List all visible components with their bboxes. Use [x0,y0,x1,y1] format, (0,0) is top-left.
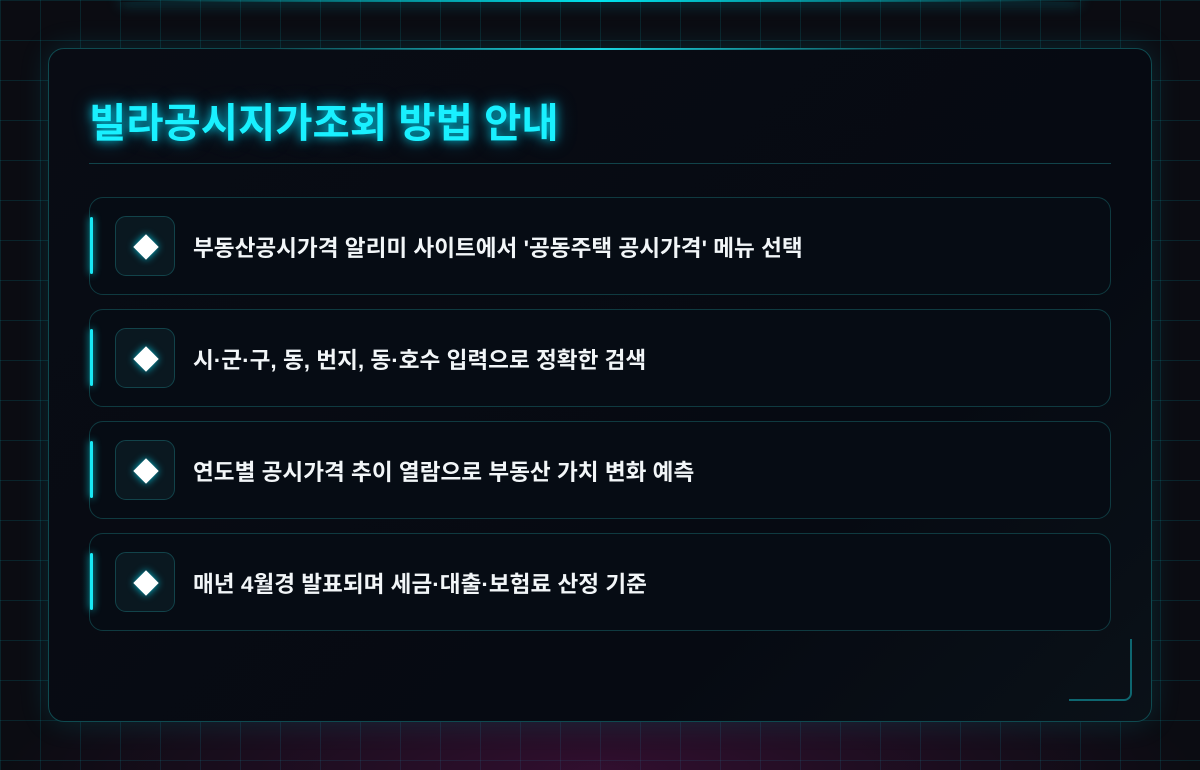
text 2: 시·군·구, 동, 번지, 동·호수 입력으로 정확한 검색 [193,348,646,373]
corner bracket [1069,639,1132,701]
item 4 [89,533,1111,631]
text 1: 부동산공시가격 알리미 사이트에서 '공동주택 공시가격' 메뉴 선택 [193,236,803,261]
title: 빌라공시지가조회 방법 안내 [89,100,559,146]
item 3 [89,421,1111,519]
text 4: 매년 4월경 발표되며 세금·대출·보험료 산정 기준 [193,572,647,597]
icon: diamond [115,440,175,500]
icon: diamond [115,328,175,388]
item 1 [89,197,1111,295]
item 2 [89,309,1111,407]
icon: diamond [115,216,175,276]
icon: diamond [115,552,175,612]
text 3: 연도별 공시가격 추이 열람으로 부동산 가치 변화 예측 [193,460,694,485]
